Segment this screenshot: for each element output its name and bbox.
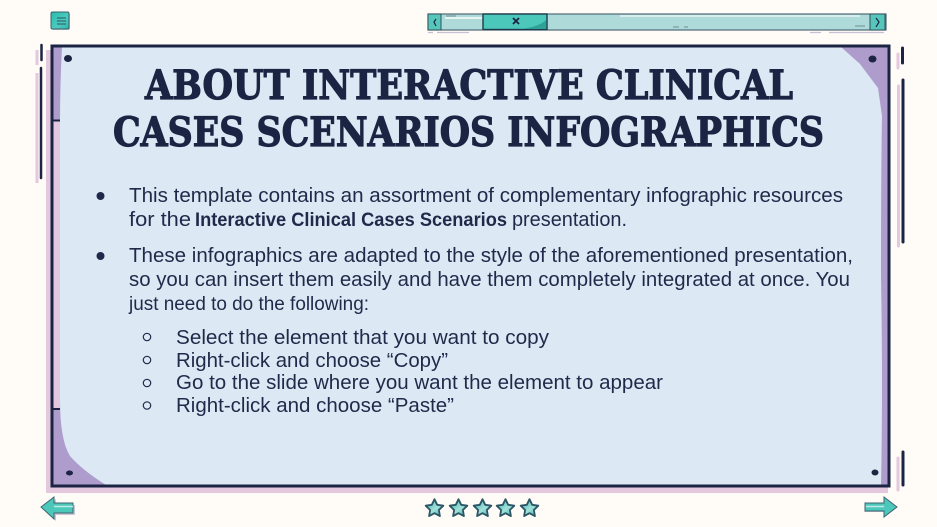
title: ABOUT INTERACTIVE CLINICAL bbox=[144, 62, 793, 109]
star 2 bbox=[450, 499, 467, 516]
text block: first bullet: for the bbox=[129, 209, 191, 231]
title bbox=[113, 62, 824, 156]
text block: sub-list bbox=[143, 327, 663, 417]
star 3 bbox=[474, 499, 491, 516]
top scrollbar bbox=[428, 14, 886, 32]
text block: first bullet: presentation. bbox=[512, 209, 627, 231]
panel outline bbox=[52, 46, 889, 486]
panel: main card bbox=[46, 46, 889, 493]
text block: first bullet: This template contains an assortment of complementary infographic resources bbox=[129, 185, 843, 207]
star 4 bbox=[497, 499, 514, 516]
text block: sub-list: Go to the slide where you want the element to appear bbox=[176, 372, 663, 394]
star rating bbox=[426, 499, 538, 516]
scrollbar thumb with x bbox=[483, 14, 547, 30]
panel pins bbox=[64, 55, 878, 476]
icon: menu button bbox=[51, 12, 70, 30]
panel corner shading bbox=[52, 46, 889, 486]
text block: first bullet: Interactive Clinical Cases Scenarios bbox=[195, 210, 507, 231]
side decoration strokes right bbox=[898, 48, 903, 490]
text block: second bullet: These infographics are adapted to the style of the aforementioned presentation, bbox=[129, 245, 853, 267]
text block: first bullet bbox=[96, 185, 843, 231]
text block: sub-list: Right-click and choose “Paste” bbox=[176, 395, 454, 417]
text block: sub-list: Select the element that you want to copy bbox=[176, 327, 549, 349]
side decoration strokes left bbox=[37, 45, 42, 183]
text block: second bullet: just need to do the following: bbox=[128, 294, 369, 315]
text block: sub-list: Right-click and choose “Copy” bbox=[176, 350, 448, 372]
text block: second bullet bbox=[96, 245, 853, 315]
scrollbar right arrow button bbox=[870, 14, 885, 30]
text block: second bullet: so you can insert them easily and have them completely integrated at once. You bbox=[129, 269, 850, 291]
star 5 bbox=[521, 499, 538, 516]
scrollbar left arrow button bbox=[428, 14, 441, 30]
icon: next arrow bbox=[864, 497, 897, 518]
title: CASES SCENARIOS INFOGRAPHICS bbox=[113, 109, 824, 156]
icon: back arrow bbox=[41, 497, 75, 521]
star 1 bbox=[426, 499, 443, 516]
